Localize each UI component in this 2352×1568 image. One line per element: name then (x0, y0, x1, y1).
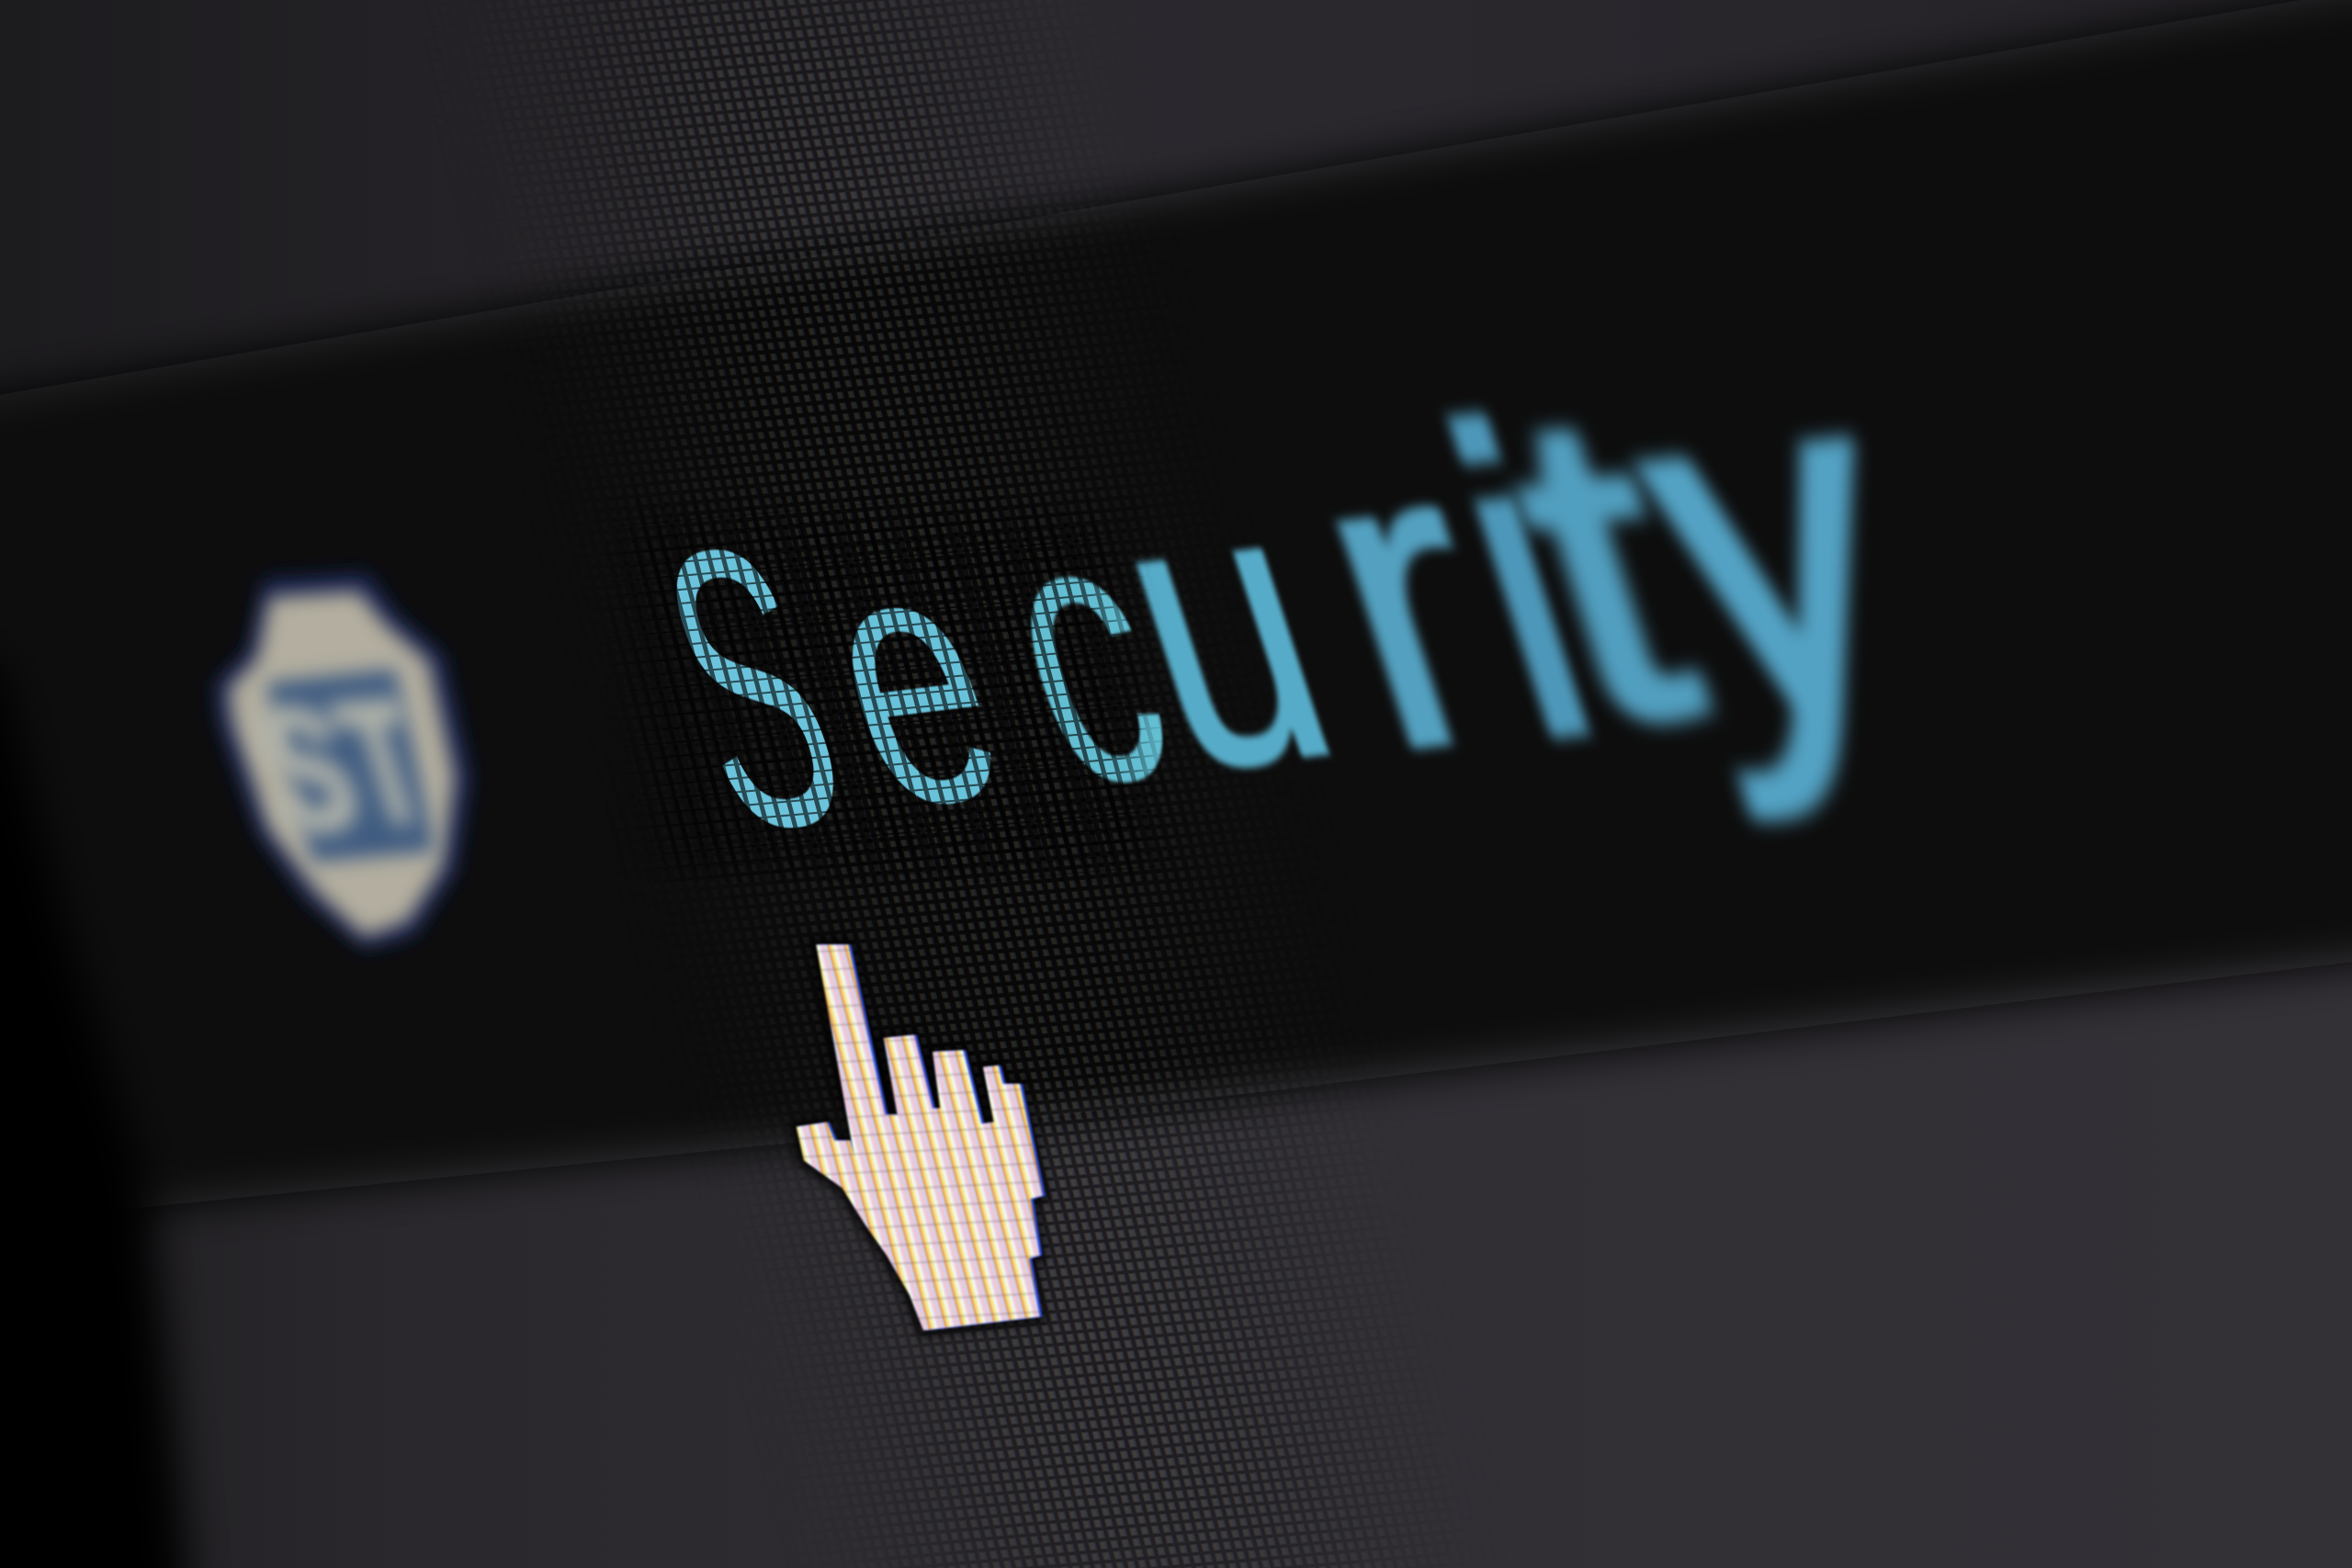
letter u: u (1073, 404, 1374, 852)
black menu band (0, 0, 2352, 1231)
letter t: t (1466, 321, 1738, 812)
letter c: c (956, 434, 1211, 866)
shield: ST lettering: S (233, 671, 379, 868)
background: lower grey screen area (0, 735, 2352, 1568)
letter r: r (1264, 355, 1544, 838)
letter e: e (779, 469, 1043, 884)
word: Security (620, 270, 1947, 915)
letter S: S (620, 461, 885, 915)
hand cursor (797, 944, 1046, 1330)
dark left edge strip (0, 643, 188, 1568)
pixel grid over the sharp letters (643, 503, 1162, 882)
letter y: y (1595, 270, 1947, 821)
hand cursor: blue fringe (799, 944, 1046, 1330)
hand cursor: dark halo (797, 944, 1043, 1330)
shield: ST lettering: T (317, 664, 449, 860)
shield: ST lettering (233, 664, 449, 868)
letter i: i (1407, 339, 1634, 826)
in-focus pixel grid highlights (579, 0, 1338, 1568)
shield icon (214, 572, 471, 949)
hand cursor: striped pixel fill (797, 944, 1043, 1330)
shield: pale body (228, 591, 455, 937)
shield: blue fringe (214, 572, 471, 949)
in-focus pixel grid lines (616, 0, 1341, 1568)
shield: blue centre panel (266, 669, 435, 862)
